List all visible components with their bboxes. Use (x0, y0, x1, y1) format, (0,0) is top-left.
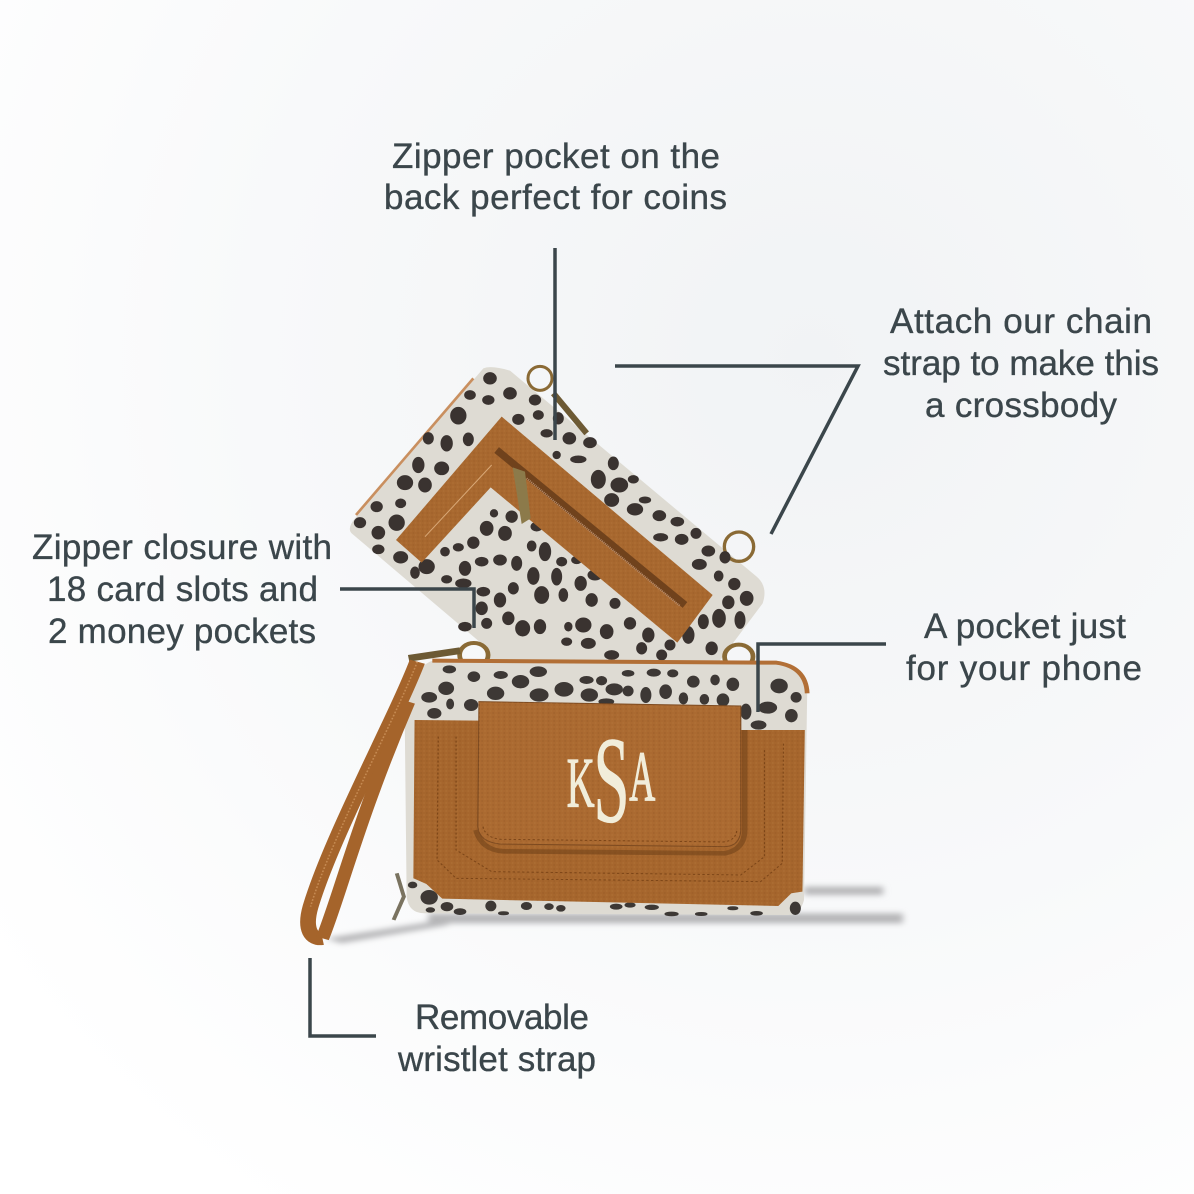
callout lines (310, 248, 886, 1036)
line: phone pocket (758, 644, 886, 712)
clasp (553, 393, 587, 433)
text: wristlet strap: wristlet strap (397, 1040, 596, 1079)
text: phone pocket (906, 607, 1142, 688)
leather front panel (413, 720, 805, 906)
zipper piping (432, 661, 807, 693)
side zipper pull (394, 873, 404, 920)
line: wristlet strap (310, 958, 376, 1036)
text: zipper pocket (384, 137, 727, 217)
leather zipper pocket (396, 417, 713, 643)
wristlet strap (308, 662, 417, 938)
text: phone pocket: for your phone (906, 649, 1142, 688)
clasp (409, 651, 460, 658)
flap shadow (476, 730, 745, 853)
back wallet: spotted with zipper pocket (350, 366, 765, 673)
front wallet: leather with monogram (308, 643, 903, 943)
text: zipper closure: 18 card slots and (47, 570, 318, 609)
text: phone pocket: A pocket just (924, 607, 1126, 646)
text: chain strap: a crossbody (925, 386, 1118, 425)
text: wristlet strap: Removable (415, 998, 589, 1037)
zipper pull (513, 467, 531, 524)
text: zipper closure: Zipper closure with (32, 528, 332, 567)
text: chain strap: strap to make this (883, 344, 1159, 383)
wallet body (405, 661, 807, 915)
text: zipper pocket: back perfect for coins (384, 178, 727, 217)
shadow (326, 887, 903, 943)
spots (355, 373, 753, 660)
text: wristlet strap (397, 998, 596, 1079)
zipper (497, 450, 685, 605)
line: zipper pocket (553, 248, 557, 440)
monogram (567, 713, 656, 849)
wallet body (350, 367, 765, 673)
monogram: S (594, 713, 629, 849)
stitching (425, 465, 492, 537)
line: zipper closure (340, 589, 474, 628)
rear ring (528, 366, 552, 390)
line: chain strap (615, 366, 858, 534)
top rings (460, 643, 488, 667)
spots (409, 666, 801, 916)
text: zipper closure: 2 money pockets (48, 612, 316, 651)
text: zipper pocket: Zipper pocket on the (392, 137, 720, 176)
monogram: K (567, 745, 595, 823)
pocket flap (478, 702, 741, 847)
text: chain strap: Attach our chain (890, 302, 1152, 341)
flap stitching (483, 827, 737, 842)
zipper piping (356, 378, 473, 515)
side ring (724, 532, 754, 561)
text: zipper closure (32, 528, 332, 651)
text: chain strap (883, 302, 1159, 425)
monogram: A (629, 738, 656, 816)
panel stitching (437, 737, 783, 882)
